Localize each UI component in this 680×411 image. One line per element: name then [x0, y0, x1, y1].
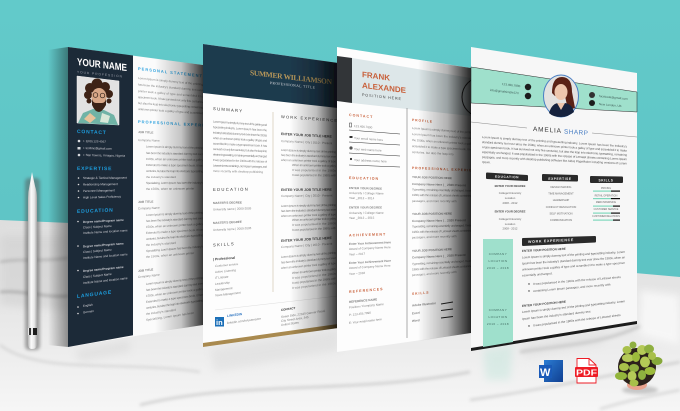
work experience entries: It was popularised in the 1960s with — [292, 226, 336, 232]
language list: German — [83, 309, 94, 314]
reflections of the resumes on the floor — [75, 330, 610, 380]
job entries: the 1500s, when an unknown printer — [146, 187, 194, 191]
professional experience heading: PROFESSIONAL EXPERIENCE — [412, 166, 482, 173]
education entries: MASTER'S DEGREE — [213, 220, 242, 225]
education column: College/University — [499, 217, 522, 221]
job entries: the industry's standard — [146, 308, 176, 316]
experience entries: YOUR JOB POSITION HERE — [412, 175, 452, 180]
icon: Word logo: W — [540, 367, 551, 379]
summary text: survived not only five centuries, but also the leap into — [213, 147, 267, 153]
expertise list — [78, 176, 127, 199]
icon: partial profile ring — [462, 77, 502, 117]
profile text: Lorem Ipsum has been the industry's standard — [412, 132, 474, 140]
work experience pill heading: WORK EXPERIENCE — [528, 238, 574, 244]
personal statement text: printer took a galley of type and scrambled it to — [138, 89, 203, 98]
expertise column: DESIGN MAKING — [551, 185, 571, 189]
work experience entries: It was popularised in the 1960s with — [292, 173, 336, 177]
contact heading: CONTACT — [349, 113, 373, 119]
work experience entries: When an unknown printer took a galley — [292, 163, 336, 168]
skills column: CUSTOMER SERVICE — [594, 208, 619, 211]
achievement entries: Enter Your Achievement Here — [349, 240, 391, 246]
summary text: Lorem Ipsum is simply dummy text of the printing and — [213, 120, 267, 127]
icon: LinkedIn: in — [216, 318, 223, 327]
header contact left: 123.456.7890 — [502, 82, 521, 88]
job entries: JOB TITLE — [138, 267, 153, 273]
personal statement text — [138, 76, 203, 115]
job entries: Specializing, Lorem Ipsum has been the industry's — [146, 181, 203, 185]
education column: 2008 - 2012 — [503, 226, 518, 230]
work experience entries: has been the industry's standard dummy text ever — [281, 256, 336, 264]
education list: Degree name/Program name — [83, 265, 124, 273]
resume 3 name heading: POSITION HERE — [362, 93, 401, 101]
job entries: Company Name — [138, 138, 160, 143]
summary text: electronic typesetting, remaining essentially unchanged — [213, 153, 267, 158]
skills list — [213, 256, 241, 297]
skills bars — [412, 301, 453, 323]
resume 1 profession: YOUR PROFESSION — [77, 70, 123, 79]
reference entry: P: 123.456.7890 — [349, 311, 371, 317]
work experience text — [522, 247, 625, 327]
job entries — [138, 130, 204, 322]
education column — [487, 174, 527, 230]
profile text — [412, 126, 474, 156]
experience entries: 1960s with the release of Letraset sheets containing — [412, 228, 472, 234]
skills column: RETAIL OPERATION — [595, 194, 618, 198]
education column: Location — [505, 196, 516, 200]
expertise list: High Level Sales Proficiency — [83, 194, 122, 199]
icon: PDF logo — [575, 358, 598, 383]
job entries: 1500s, when an unknown printer took a galley — [146, 157, 203, 162]
expertise list: Relationship Management — [83, 182, 118, 186]
resume 3 name heading: ALEXANDE — [362, 81, 407, 95]
experience entries: passages, and more recently with — [412, 234, 457, 239]
header contact right: facebook@gmail.com — [599, 94, 628, 101]
language heading: LANGUAGE — [77, 289, 112, 300]
icon: LinkedIn — [215, 317, 224, 327]
skills heading: SKILLS — [213, 241, 235, 247]
panel: resume 4 Amelia Sharp — [471, 47, 637, 351]
education entries: University name | 2000-2005 — [213, 206, 252, 211]
summary text: It was popularised in the 1960s with the release of — [213, 158, 267, 164]
achievement entries: Year – 2017 — [349, 252, 365, 256]
contact details: + Star Towers, Vi-lagos, Nigeria — [83, 153, 125, 158]
panel: resume 2 Summer Williamson — [203, 44, 338, 347]
skills column: SKILLS — [599, 178, 613, 182]
education list: Class | Subject Name — [83, 272, 112, 279]
work experience text: Ipsum has been the industry's standard dummy text — [522, 309, 591, 321]
references heading: REFERENCES — [349, 287, 384, 294]
education list: Class | Subject Name — [83, 224, 112, 229]
header contact right: New London, UK — [599, 102, 622, 108]
education entries — [213, 200, 252, 232]
footer contact: Street Side, 22345 Genner Road, — [281, 309, 325, 319]
job entries: the industry's standard — [146, 175, 176, 179]
resume 3 name heading — [362, 70, 407, 101]
work experience heading: WORK EXPERIENCE — [281, 114, 338, 123]
personal statement text: but also the leap into electronic typesetting remaining — [138, 101, 203, 110]
work experience text: Lorem Ipsum is simply dummy text of the printing and typesetting industry. Lorem — [522, 299, 625, 314]
work experience entries: It was popularised in the 1960s — [292, 272, 336, 280]
experience entries: passages, and more recently with — [412, 199, 457, 203]
contact details: + testline@gmail.com — [83, 146, 112, 151]
personal statement text: specimen book. It has survived not only five centuries — [138, 95, 203, 104]
summary paragraph: passages, and more recently with desktop publishing software like Aldus PageMaker including versions of Lorem — [482, 155, 627, 166]
job entries: the 1500s, when an unknown printer — [146, 251, 194, 259]
experience entries: 1960s with the release of Letraset sheets containing — [412, 193, 472, 198]
education list: Class | Subject Name — [83, 248, 112, 254]
education list — [77, 218, 128, 285]
name: Amelia Sharp: SHARP — [564, 129, 588, 137]
job entries: 1500s, when an unknown printer took a galley — [146, 222, 203, 229]
summary text: typesetting industry. Lorem Ipsum has been the — [213, 125, 267, 132]
name: Amelia Sharp: AMELIA — [533, 126, 562, 135]
contact rows — [349, 123, 400, 167]
job entries: 1500s, when an unknown printer took a galley — [146, 287, 203, 298]
summary paragraph: standard dummy text ever since the 1500s, when an unknown printer took a galley of type and scrambled it to make — [482, 140, 627, 153]
education entries: Year _2012 – 2014 — [349, 196, 375, 200]
language list: English — [83, 303, 93, 308]
skills bars: Excel — [412, 311, 420, 315]
LinkedIn link: linkedin.com/in/username — [227, 317, 261, 325]
job entries: Specializing, Lorem Ipsum has been — [146, 311, 194, 322]
education heading: EDUCATION — [213, 187, 249, 192]
education list: Degree name/Program name — [83, 218, 124, 224]
education list: Institute Name and location name — [83, 276, 128, 285]
reference entry: E: Your email name here — [349, 317, 382, 325]
skills list: IT Literate — [215, 275, 229, 280]
panel: resume 1 dark sidebar — [68, 47, 219, 347]
work experience entries: has been the industry's standard dummy text ever — [281, 153, 336, 159]
header contact right — [589, 92, 628, 108]
job entries: JOB TITLE — [138, 200, 153, 204]
expertise column — [543, 175, 577, 222]
work experience entries: when an unknown printer took a galley of type — [281, 158, 336, 163]
header contact left: info@gmailsimple123 — [490, 88, 519, 95]
personal statement text: unknown printer took a galley of type and scrambled — [138, 107, 203, 115]
language list — [77, 303, 94, 314]
work experience entries: Lorem Ipsum is simply dummy text of the printing — [281, 203, 336, 208]
work experience text: It was popularised in the 1960s with the release of Letraset sheets — [533, 275, 621, 286]
resume 2 professional title: PROFESSIONAL TITLE — [270, 81, 316, 90]
personal statement text: has been the industry's standard dummy text ever — [138, 83, 203, 92]
shadow of the resumes on the wall — [48, 47, 68, 347]
education column: EDUCATION — [495, 175, 519, 179]
expertise list: Personnel Management — [83, 188, 115, 193]
work experience entries: Company Name | City | 2010 - Present — [281, 139, 333, 145]
education heading: EDUCATION — [77, 208, 114, 215]
work experience text: It was popularised in the 1960s with the release of Letraset sheets — [533, 313, 621, 327]
summary heading: SUMMARY — [213, 106, 243, 113]
icon: Word logo — [539, 360, 563, 382]
personal statement text: Lorem Ipsum is simply dummy text of the printing — [138, 76, 203, 87]
achievement entries: Year – 2018 — [349, 271, 365, 276]
education list: Institute Name and location name — [83, 228, 128, 235]
skills heading: SKILLS — [412, 291, 429, 296]
summary paragraph: essentially unchanged. It was popularised in the 1960s with the release of Letraset sheets containing Lorem Ipsum — [482, 150, 627, 161]
job entries: Extended to make a type specimen book. It has — [146, 293, 203, 304]
work experience entries: When an unknown printer took a galley — [292, 267, 336, 275]
job entries: Company Name — [138, 273, 160, 279]
job entries: the industry's standard — [146, 241, 176, 247]
experience entries: 1960s with the release of Letraset sheets containing — [412, 264, 472, 271]
contact rows: Your address name here — [354, 158, 387, 164]
job entries: Specializing, Lorem Ipsum has been the industry's — [146, 244, 203, 253]
experience entries: Company Name Here | _ 2020 Present — [412, 182, 466, 187]
LinkedIn link — [227, 312, 261, 325]
footer contact: City Street Area, 345 — [281, 315, 309, 323]
work experience text: ENTER YOUR POSITION HERE — [522, 300, 566, 308]
achievement entries — [349, 240, 391, 276]
LinkedIn link: LINKEDIN — [227, 312, 243, 318]
education entries — [349, 186, 384, 220]
work experience entries: Lorem Ipsum is simply dummy text of the printing — [281, 148, 336, 154]
skills list: | Professional — [213, 256, 235, 261]
contact rows: Your email name here — [354, 136, 384, 142]
expertise column: CONFLICT RESOLUTION — [546, 205, 576, 209]
expertise column: TIME MANAGEMENT — [548, 192, 574, 196]
job entries: centuries, but also the leap into electronic typesetting — [146, 298, 203, 310]
education list: Degree name/Program name — [83, 241, 124, 248]
work experience pill heading — [523, 237, 595, 245]
mint company sidebar: 2016 – 2018 — [487, 322, 509, 326]
experience entries: Typesetting, remaining essentially unchanged. It was — [412, 188, 472, 193]
achievement entries: Award of Company Name Here — [349, 245, 391, 251]
summary text: Letraset sheets containing Lorem Ipsum passages, and — [213, 164, 267, 169]
job entries: Extended to make a type specimen book. It has — [146, 163, 203, 168]
contact heading: CONTACT — [77, 129, 107, 136]
job entries: Lorem Ipsum is simply dummy text of the printing — [146, 145, 203, 150]
work experience text: unknown printer took a galley of type and scrambled it to make a type specimen — [522, 261, 625, 271]
skills list: Team Management — [215, 291, 241, 297]
skills column: PRICING — [601, 187, 611, 190]
contact details: + 1(00) 123 4567 — [83, 139, 106, 144]
summary text: industry's standard dummy text ever since the 1500s — [213, 131, 267, 137]
profile text: scrambled it to make a type specimen book. It has — [412, 144, 474, 152]
work experience entries — [281, 132, 336, 290]
experience entries: Company Name Here | _ 2020 Present — [412, 218, 466, 223]
work experience entries: ENTER YOUR JOB TITLE HERE — [281, 188, 333, 192]
marble floor — [0, 220, 680, 411]
summary text — [213, 120, 267, 174]
name: Amelia Sharp — [533, 126, 588, 137]
summary paragraph — [482, 135, 627, 166]
work experience entries: It was popularised in the 1960s — [292, 281, 336, 290]
footer contact — [281, 306, 325, 327]
contact details — [78, 139, 125, 158]
education column: ENTER YOUR DEGREE — [495, 184, 526, 188]
mint company sidebar: LOCATION — [488, 315, 508, 319]
summary text: scrambled it to make a type specimen book. It has — [213, 142, 267, 148]
experience entries: passages, and more recently with — [412, 270, 457, 277]
education entries: MASTER'S DEGREE — [213, 200, 242, 205]
resume 1 name heading: YOUR NAME — [77, 57, 127, 74]
summary text: when an unknown printer took a galley of type and — [213, 136, 267, 143]
education column: 2008 - 2012 — [503, 201, 518, 205]
mint company sidebar: LOCATION — [488, 259, 508, 263]
summary paragraph: Ipsum. — [482, 160, 491, 164]
expertise column: LEADERSHIP — [553, 198, 569, 202]
resume 3 name heading: FRANK — [362, 70, 390, 83]
skills list: Active Listening — [215, 268, 236, 274]
work experience entries: Lorem Ipsum is simply dummy text of the printing — [281, 251, 336, 259]
work experience entries: It was popularised in the 1960s with — [292, 276, 336, 285]
mint company sidebar: 2016 – 2018 — [487, 266, 509, 270]
job entries: has been the industry's standard dummy text ever — [146, 281, 203, 292]
header contact left — [490, 82, 531, 99]
experience entries: Company Name Here | _ 2020 Present — [412, 253, 466, 259]
skills bars: Word — [412, 318, 420, 323]
experience entries: YOUR JOB POSITION HERE — [412, 212, 452, 216]
experience entries — [412, 175, 472, 277]
work experience entries: when an unknown printer took a galley of type — [281, 261, 336, 270]
work experience entries: When an unknown printer took a galley — [292, 216, 336, 222]
work experience entries: Company Name | City | 2010 - Present — [281, 242, 333, 249]
work experience text: ENTER YOUR POSITION HERE — [522, 247, 566, 253]
panel: resume 3 Frank Alexande — [337, 47, 502, 352]
achievement entries: Award of Company Name Here — [349, 263, 391, 270]
icon: PDF logo: PDF — [576, 368, 597, 378]
reference entry: REFERENCE NAME — [349, 297, 377, 304]
experience entries: YOUR JOB POSITION HERE — [412, 247, 452, 253]
education entries: ENTER YOUR DEGREE — [349, 186, 382, 191]
education column: ENTER YOUR DEGREE — [495, 210, 526, 214]
experience entries: Typesetting, remaining essentially unchanged. It was — [412, 259, 472, 266]
job entries: JOB TITLE — [138, 130, 153, 135]
expertise column: COMMUNICATION — [550, 218, 572, 222]
photo: man with curly hair — [77, 76, 119, 125]
skills column: MERCHANDISING — [596, 201, 616, 204]
job entries: Company Name — [138, 206, 160, 210]
education column: College/University — [499, 191, 522, 195]
expertise column: EXPERTISE — [548, 177, 572, 181]
job entries: centuries, but also the leap into electronic typesetting — [146, 169, 203, 173]
mint company sidebar: COMPANY — [489, 252, 507, 256]
work experience text: containing Lorem Ipsum passages, and more recently with — [533, 282, 611, 293]
icon: stylus pencil — [25, 172, 40, 350]
profile text: Lorem Ipsum is simply dummy text of the printing — [412, 126, 474, 135]
work experience entries: It was popularised in the 1960s — [292, 221, 336, 227]
work experience entries: ENTER YOUR JOB TITLE HERE — [281, 132, 333, 139]
education column: Location — [505, 222, 516, 226]
job entries: has been the industry's standard dummy text ever — [146, 216, 203, 223]
resume 2 name heading: SUMMER WILLIAMSON — [250, 68, 333, 86]
education entries: University name | 2000-2005 — [213, 226, 252, 232]
education list: Institute Name and location name — [83, 252, 128, 260]
summary text: more recently with desktop publishing — [213, 169, 263, 174]
reference entry: Position / Company Name — [349, 302, 384, 309]
work experience text: essentially unchanged. — [522, 271, 553, 277]
icon: succulent plant in pot — [615, 342, 662, 394]
mint company sidebar — [483, 239, 513, 347]
job entries: Lorem Ipsum is simply dummy text of the printing — [146, 210, 203, 217]
work experience entries: It was popularised in the 1960s — [292, 168, 336, 173]
work experience entries: Company Name | City | 2010 - Present — [281, 193, 333, 198]
profile text: centuries, but also the leap into — [412, 150, 454, 156]
expertise heading: EXPERTISE — [77, 166, 112, 172]
skills list: Leadership — [215, 280, 230, 286]
mint header band — [471, 67, 637, 112]
expertise list: Strategic & Tactical Management — [83, 176, 127, 180]
work experience text: Ipsum has been the industry's standard dummy text ever since the 1500s, when an — [522, 255, 625, 265]
work experience entries: has been the industry's standard dummy text ever — [281, 208, 336, 213]
summary paragraph: Lorem Ipsum is simply dummy text of the printing and typesetting industry. Lorem Ipsum has been the industry's — [482, 135, 627, 148]
profile text: the 1500s, when an unknown printer took a galley — [412, 138, 474, 146]
job entries: centuries, but also the leap into electronic typesetting — [146, 233, 203, 241]
personal statement heading: PERSONAL STATEMENT — [138, 66, 203, 78]
job entries: has been the industry's standard dummy text ever — [146, 151, 203, 156]
contact rows: 123.456.7890 — [354, 124, 373, 129]
education entries: ENTER YOUR DEGREE — [349, 206, 382, 210]
job entries: Lorem Ipsum is simply dummy text of the printing — [146, 276, 203, 286]
achievement entries: Enter Your Achievement Here — [349, 259, 391, 265]
summary paragraph: a type specimen book. It has survived not only five centuries, but also the leap into electronic typesetting, remaining — [482, 145, 627, 157]
work experience text: Lorem Ipsum is simply dummy text of the printing and typesetting industry. Lorem — [522, 250, 625, 259]
education entries: Year _2012 – 2015 — [349, 216, 375, 220]
achievement heading: ACHIEVEMENT — [349, 232, 386, 237]
profile heading: PROFILE — [412, 118, 433, 124]
skills list: Management — [215, 286, 233, 292]
reference entry — [349, 297, 384, 325]
professional experience heading: PROFESSIONAL EXPERIENCE — [138, 119, 219, 128]
job entries: Extended to make a type specimen book. It has — [146, 228, 203, 235]
education entries: University / College Name — [349, 211, 384, 215]
skills list: Customer service — [215, 262, 239, 268]
experience entries: Typesetting, remaining essentially unchanged. It was — [412, 223, 472, 228]
photo: woman portrait — [544, 75, 578, 117]
education entries: University / College Name — [349, 191, 384, 196]
work experience entries: ENTER YOUR JOB TITLE HERE — [281, 236, 332, 243]
footer contact: United States — [281, 320, 299, 327]
skills column — [591, 177, 622, 221]
footer contact: CONTACT — [281, 306, 296, 312]
mint company sidebar: COMPANY — [489, 308, 507, 312]
expertise column: SELF MOTIVATION — [550, 212, 573, 216]
contact rows: Your web name here — [354, 147, 382, 153]
skills bars: Adobe Illustrator — [412, 301, 437, 307]
teal wall background — [0, 0, 680, 290]
education heading: EDUCATION — [349, 176, 379, 181]
work experience entries: when an unknown printer took a galley of type — [281, 212, 336, 218]
skills column: CUSTOMER RELATIONS — [592, 215, 620, 218]
